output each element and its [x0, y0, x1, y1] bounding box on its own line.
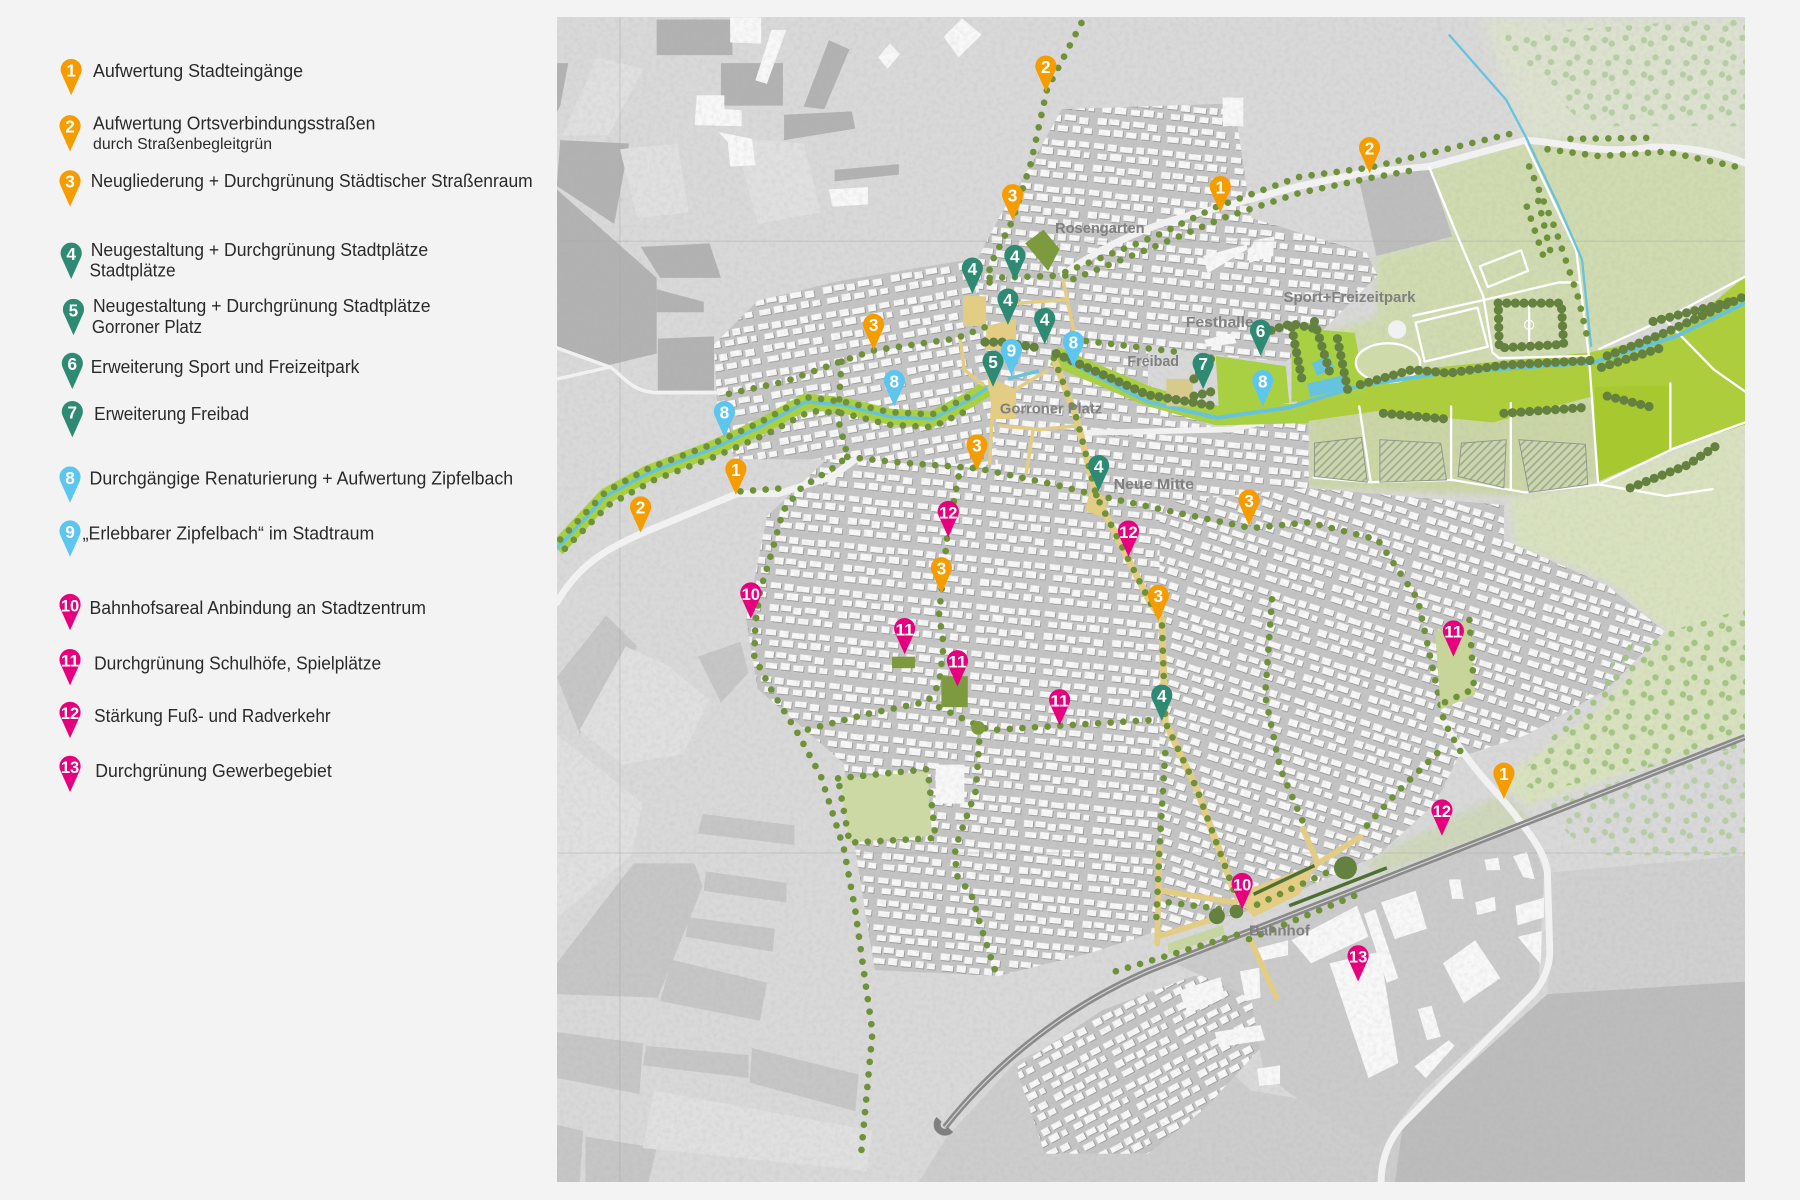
place names: Neue Mitte — [1114, 476, 1194, 493]
legend item 2 — [59, 113, 375, 153]
legend item 5 — [63, 295, 430, 337]
legend item 8: 8 — [65, 468, 75, 488]
sage landscape areas — [1286, 17, 1745, 875]
marker 3 c — [966, 434, 988, 471]
marker 8 c — [1063, 331, 1084, 367]
legend item 9: 9 — [65, 522, 75, 542]
parks, schoolyards and orchards — [838, 230, 1475, 843]
marker 3 d — [1238, 489, 1260, 526]
legend — [59, 58, 533, 792]
marker 4 c: 4 — [1003, 290, 1013, 310]
marker 4 e — [1088, 455, 1109, 491]
place names: Freibad — [1127, 353, 1179, 370]
map — [557, 17, 1745, 1182]
legend item 2: Aufwertung Ortsverbindungsstraßen — [93, 113, 375, 134]
legend item 5: Gorroner Platz — [92, 316, 202, 337]
agricultural fields — [557, 20, 899, 1182]
riparian tree clusters — [560, 166, 1745, 971]
legend item 4: Stadtplätze — [90, 260, 176, 281]
marker 9 — [1001, 339, 1022, 375]
legend item 5: 5 — [69, 300, 79, 320]
marker 2 east: 2 — [1365, 138, 1374, 158]
legend item 1: Aufwertung Stadteingänge — [93, 60, 303, 81]
legend item 2: durch Straßenbegleitgrün — [93, 136, 272, 153]
street trees — [729, 23, 1740, 1155]
legend item 1: 1 — [66, 60, 76, 80]
marker 11 d — [1443, 620, 1464, 657]
place names: Sport+Freizeitpark — [1283, 289, 1416, 306]
marker 4 c — [997, 289, 1019, 325]
legend item 12 — [59, 702, 331, 738]
legend item 6: Erweiterung Sport und Freizeitpark — [91, 356, 360, 377]
legend item 11: Durchgrünung Schulhöfe, Spielplätze — [94, 652, 381, 673]
legend item 2: 2 — [65, 117, 75, 137]
legend item 6: 6 — [68, 354, 77, 374]
marker 6 — [1250, 320, 1271, 356]
legend item 6 — [62, 353, 360, 389]
town fabric — [714, 103, 1665, 1154]
legend item 3 — [59, 170, 533, 207]
marker 11 a — [894, 618, 915, 654]
marker 3 f: 3 — [1154, 586, 1163, 606]
legend item 13 — [59, 756, 332, 792]
place names — [1000, 220, 1416, 940]
large white buildings — [695, 17, 1544, 1086]
legend item 7 — [62, 401, 249, 437]
marker 5 — [982, 351, 1004, 387]
marker 12 a — [938, 501, 959, 537]
white roads — [557, 140, 1745, 1182]
legend item 4 — [61, 239, 428, 281]
marker 4 e: 4 — [1094, 456, 1104, 476]
place names: Festhalle — [1186, 314, 1254, 331]
marker 10 b — [1232, 873, 1253, 909]
marker 3 b: 3 — [869, 315, 878, 335]
marker 3 f — [1148, 585, 1169, 621]
legend item 3: Neugliederung + Durchgrünung Städtischer Straßenraum — [91, 170, 533, 191]
bright green river corridor — [557, 277, 1745, 549]
grid lines — [558, 17, 1745, 1182]
legend item 8 — [59, 466, 513, 503]
marker 8 a — [714, 401, 735, 437]
marker 11 b: 11 — [948, 653, 967, 672]
marker 3 a: 3 — [1008, 185, 1017, 205]
marker 2 west — [630, 496, 651, 533]
marker 8 b — [884, 370, 905, 406]
marker 11 b — [947, 650, 968, 687]
aerial base — [557, 16, 1746, 1182]
marker 4 a: 4 — [968, 259, 978, 279]
marker 12 b — [1118, 520, 1139, 557]
marker 4 d: 4 — [1040, 309, 1050, 329]
legend item 10: Bahnhofsareal Anbindung an Stadtzentrum — [90, 597, 426, 618]
legend item 3: 3 — [65, 172, 75, 192]
marker 2 north — [1035, 55, 1056, 92]
legend item 13: 13 — [61, 758, 79, 777]
marker 2 west: 2 — [636, 498, 645, 518]
legend item 7: Erweiterung Freibad — [94, 403, 249, 424]
legend item 4: Neugestaltung + Durchgrünung Stadtplätze — [91, 239, 428, 260]
marker 13 — [1348, 945, 1369, 982]
legend item 11 — [59, 649, 381, 685]
railway — [937, 737, 1745, 1132]
legend item 9: „Erlebbarer Zipfelbach“ im Stadtraum — [83, 523, 374, 544]
legend item 10 — [59, 594, 426, 630]
marker 2 north: 2 — [1041, 57, 1051, 77]
marker 12 c: 12 — [1433, 802, 1451, 821]
marker 10 a: 10 — [742, 585, 760, 604]
legend item 9 — [59, 520, 374, 557]
marker 11 a: 11 — [895, 620, 914, 639]
marker 8 c: 8 — [1069, 332, 1079, 352]
hatched vineyard parcels — [1314, 437, 1588, 493]
legend item 12: 12 — [61, 704, 79, 723]
marker 9: 9 — [1007, 340, 1016, 360]
legend item 8: Durchgängige Renaturierung + Aufwertung Zipfelbach — [90, 467, 513, 488]
legend item 5: Neugestaltung + Durchgrünung Stadtplätze — [93, 295, 430, 316]
marker 8 d — [1252, 370, 1273, 406]
marker 3 a — [1002, 184, 1023, 220]
legend item 13: Durchgrünung Gewerbegebiet — [95, 760, 332, 781]
place names: Gorroner Platz — [1000, 400, 1102, 417]
marker 4 b — [1004, 245, 1025, 281]
marker 3 e: 3 — [937, 559, 946, 579]
marker 4 a — [962, 258, 983, 294]
marker 12 b: 12 — [1119, 523, 1138, 542]
marker 8 d: 8 — [1258, 371, 1268, 391]
place names: Bahnhof — [1249, 923, 1310, 940]
marker 2 east — [1359, 137, 1380, 173]
legend item 10: 10 — [61, 596, 79, 615]
marker 7 — [1193, 353, 1214, 389]
marker 1 west — [725, 458, 746, 495]
marker 3 e — [931, 557, 952, 594]
legend item 7: 7 — [68, 402, 77, 422]
marker 6: 6 — [1256, 321, 1265, 341]
marker 5: 5 — [988, 352, 998, 372]
field tracks — [1313, 144, 1745, 496]
marker 4 f — [1151, 685, 1172, 721]
map markers — [630, 55, 1514, 982]
legend item 12: Stärkung Fuß- und Radverkehr — [94, 705, 331, 726]
water: Zipfelbach — [557, 34, 1745, 549]
legend item 11: 11 — [61, 651, 79, 670]
marker 12 c — [1431, 799, 1452, 836]
marker 8 b: 8 — [890, 371, 900, 391]
marker 1 north: 1 — [1216, 177, 1226, 197]
pale trees — [1498, 17, 1745, 855]
marker 13: 13 — [1349, 948, 1367, 967]
marker 7: 7 — [1198, 354, 1208, 374]
marker 3 c: 3 — [972, 436, 982, 456]
forest and woodland — [918, 855, 1745, 1182]
marker 11 d: 11 — [1444, 623, 1463, 642]
marker 10 b: 10 — [1233, 875, 1251, 894]
legend item 1 — [61, 59, 303, 95]
marker 4 f: 4 — [1157, 686, 1167, 706]
place names: Rosengarten — [1055, 220, 1145, 237]
marker 3 d: 3 — [1244, 491, 1254, 511]
aerial noise texture — [557, 16, 1746, 1182]
marker 10 a — [740, 582, 761, 619]
marker 1 west: 1 — [731, 460, 741, 480]
yellow paved paths and squares — [960, 280, 1360, 998]
marker 1 east — [1493, 763, 1514, 799]
marker 1 east: 1 — [1499, 764, 1509, 784]
marker 4 b: 4 — [1010, 246, 1020, 266]
marker 1 north — [1210, 176, 1231, 212]
marker 12 a: 12 — [939, 503, 957, 522]
marker 11 c — [1049, 689, 1070, 726]
marker 4 d — [1034, 308, 1055, 344]
marker 8 a: 8 — [720, 402, 730, 422]
marker 3 b — [863, 314, 884, 350]
marker 11 c: 11 — [1050, 692, 1069, 711]
legend item 4: 4 — [66, 244, 76, 264]
